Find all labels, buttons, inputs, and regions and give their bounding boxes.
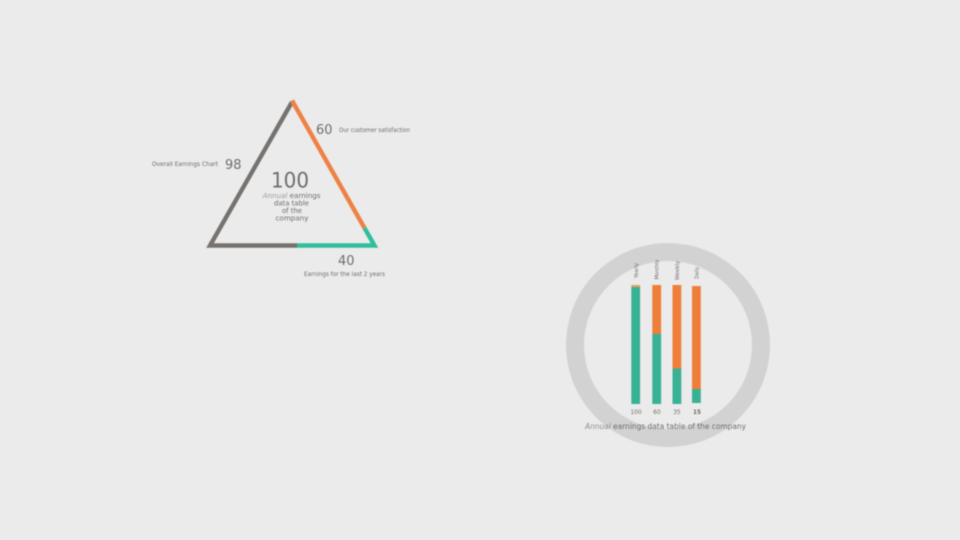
centre caption	[261, 192, 321, 222]
bar: weekly	[672, 285, 681, 404]
rotated bar labels	[634, 259, 700, 280]
triangle: grey sides	[210, 102, 297, 246]
bar values	[630, 410, 701, 416]
label: overall earnings chart: Overall Earnings Chart	[152, 160, 218, 168]
bar values: 100	[630, 410, 642, 416]
bar values: 35	[673, 410, 681, 416]
chart caption: Annual earnings data table of the company	[584, 422, 746, 431]
bar values: 60	[653, 410, 661, 416]
grey ring	[575, 252, 761, 438]
label: earnings for last 2 years: Earnings for the last 2 years	[304, 270, 386, 278]
label: customer satisfaction: Our customer satisfaction	[339, 127, 410, 134]
value: 60: 60	[316, 123, 332, 138]
centre value: 100: 100	[271, 168, 309, 192]
bar values: 15	[693, 410, 701, 416]
rotated bar labels: Monthly	[654, 259, 660, 280]
bar: daily	[692, 286, 701, 403]
rotated bar labels: Daily	[694, 267, 700, 279]
rotated bar labels: Yearly	[634, 263, 640, 279]
centre caption: of the	[282, 207, 302, 215]
bar: yearly	[631, 285, 640, 404]
centre caption: Annual earnings	[261, 192, 321, 200]
bar: monthly	[652, 285, 661, 404]
centre caption: data table	[274, 200, 309, 208]
triangle: orange side	[292, 100, 364, 228]
triangle chart	[152, 100, 410, 278]
value: 40: 40	[338, 254, 354, 269]
triangle: green corner	[297, 228, 374, 246]
value: 98: 98	[225, 158, 242, 173]
centre caption: company	[276, 214, 308, 222]
rotated bar labels: Weekly	[675, 261, 681, 280]
circular bar chart	[575, 252, 761, 438]
